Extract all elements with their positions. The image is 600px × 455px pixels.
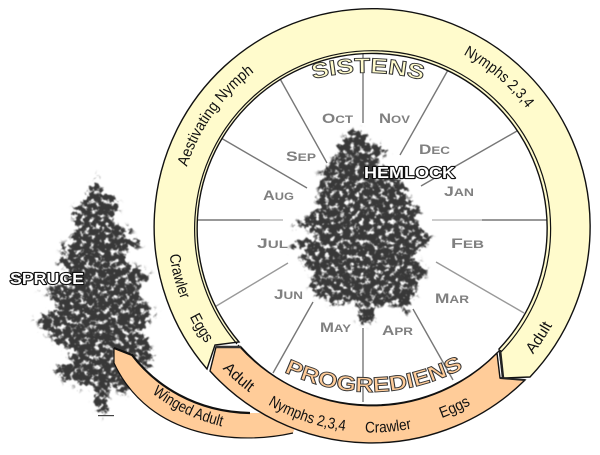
progrediens heading: PROGREDIENS — [284, 357, 462, 393]
spruce ground line — [98, 415, 114, 416]
progrediens orange band — [209, 344, 526, 444]
month labels: AUG — [263, 187, 294, 203]
month labels: JAN — [444, 183, 474, 199]
band label: adult: Adult — [527, 322, 552, 354]
band label: crawler: Crawler — [170, 254, 189, 298]
month labels: F EB — [451, 235, 484, 251]
band label: eggs: Eggs — [190, 312, 212, 342]
month labels: DEC — [419, 141, 450, 157]
month labels: J UL — [257, 235, 288, 251]
month labels: JUN — [274, 286, 303, 302]
band label: nymphs: Nymphs 2,3,4 — [464, 46, 534, 108]
spruce tree — [34, 176, 157, 415]
sistens yellow band — [153, 8, 591, 378]
month labels: SEP — [286, 148, 316, 164]
month spokes — [198, 52, 547, 402]
sistens heading: SISTENS — [312, 58, 424, 80]
hemlock label: HEMLOCK — [364, 165, 456, 182]
band label: nymphs: Nymphs 2,3,4 — [268, 396, 346, 432]
month labels: MAR — [435, 290, 469, 306]
month labels: OCT — [322, 110, 353, 126]
band label: adult: Adult — [222, 364, 254, 392]
month labels: MAY — [320, 319, 352, 335]
band label: aestivating nymph: Aestivating Nymph — [178, 66, 254, 167]
month labels: NOV — [379, 110, 411, 126]
band label: crawler: Crawler — [366, 420, 410, 433]
winged adult arrow — [113, 347, 294, 438]
month labels: APR — [382, 322, 413, 338]
spruce label: SPRUCE — [10, 271, 84, 288]
month labels — [257, 110, 484, 338]
winged adult label: Winged Adult — [154, 384, 224, 426]
band label: eggs: Eggs — [438, 398, 470, 418]
hemlock tree — [290, 124, 432, 323]
